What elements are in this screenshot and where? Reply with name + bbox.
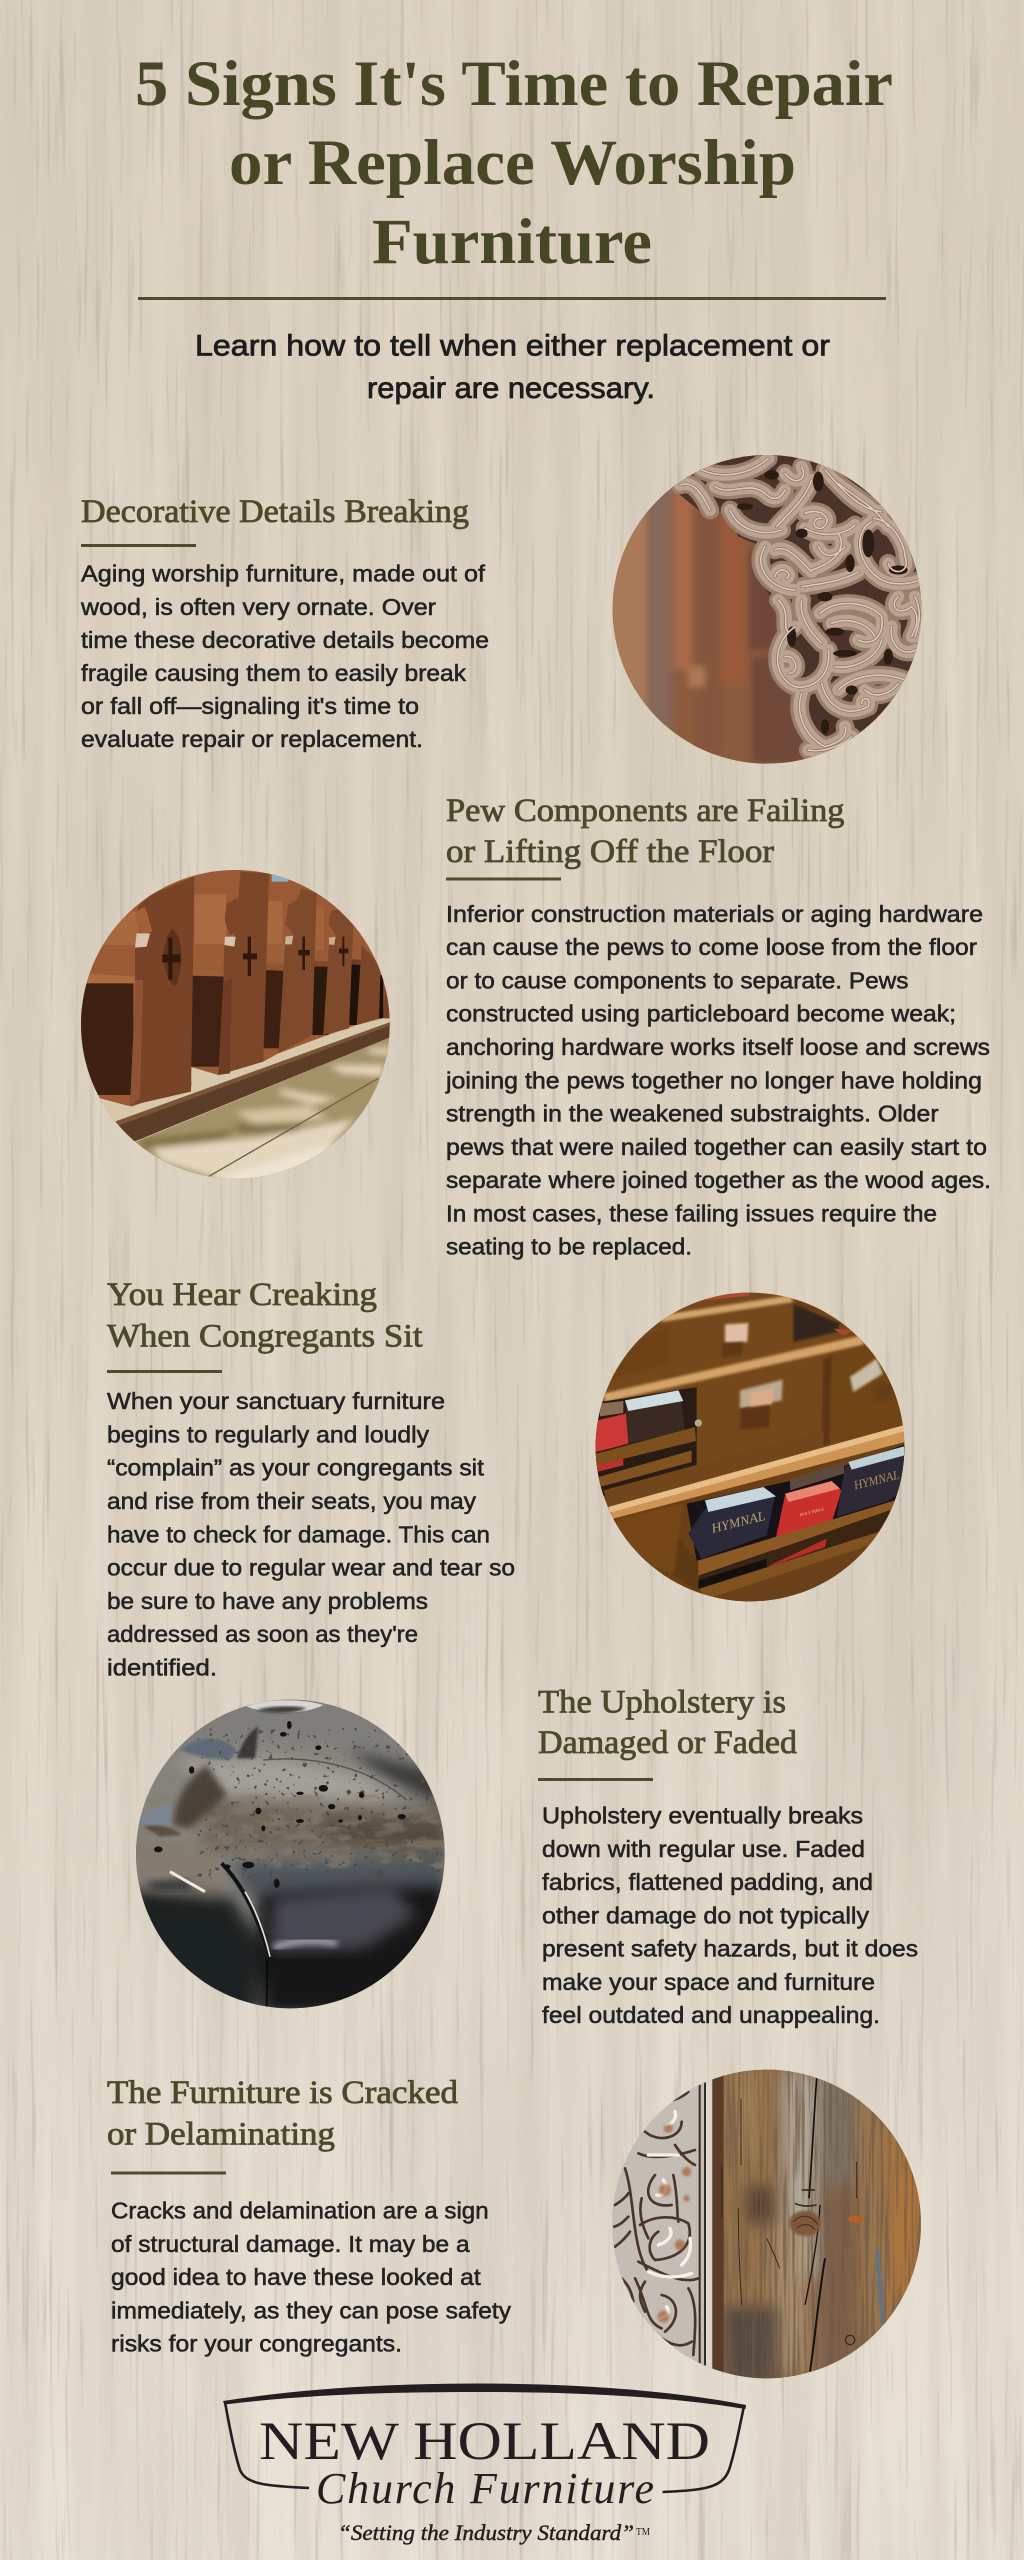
body text: pew components: Inferior construction materials or aging hardware [446,901,983,927]
heading: cracked: The Furniture is Cracked [107,2075,459,2111]
panel: you hear creaking [107,1277,915,1680]
body text: pew components: joining the pews together no longer have holding [445,1067,982,1093]
body text: upholstery: fabrics, flattened padding, and [542,1869,873,1895]
heading rule [107,1370,222,1373]
body text: creaking: When your sanctuary furniture [107,1388,445,1414]
body text: decorative details: Aging worship furniture, made out of [81,561,486,587]
subtitle: repair are necessary. [367,372,655,405]
heading: decorative details: Decorative Details Breaking [81,494,469,530]
body text: creaking: identified. [107,1654,217,1680]
body text: pew components: or to cause components to separate. Pews [446,967,908,993]
body text: creaking: be sure to have any problems [107,1588,428,1614]
panel: furniture cracked [107,2065,930,2385]
body text: upholstery: present safety hazards, but it does [542,1936,918,1962]
body text: pew components [445,901,991,1260]
body text: pew components: anchoring hardware works itself loose and screws [446,1034,990,1060]
shaded under-seat areas [75,963,383,1095]
body text: creaking [107,1388,515,1680]
body text: pew components: In most cases, these failing issues require the [446,1200,937,1226]
heading rule [111,2172,226,2174]
body text: pew components: seating to be replaced. [446,1234,692,1260]
heading rule [81,544,196,547]
heading: pew components: or Lifting Off the Floor [446,834,774,870]
body text: cracked: of structural damage. It may be a [111,2231,470,2257]
photo: damaged leather [130,1695,455,2015]
heading: upholstery: Damaged or Faded [538,1725,798,1761]
heading rule [446,878,561,880]
subtitle [195,330,830,405]
cracks and knots [722,2078,857,2372]
front rack rails [693,1500,895,1576]
body text: upholstery: other damage do not typically [542,1902,870,1928]
front books: HOLY BIBLE [799,1506,825,1517]
front books: HYMNAL [709,1508,767,1536]
base rail [115,1022,392,1143]
heading: creaking: When Congregants Sit [107,1319,423,1355]
logo wordmark: NEW HOLLAND [259,2411,710,2471]
body text: pew components: constructed using particleboard become weak; [446,1001,956,1027]
body text: creaking: addressed as soon as they're [107,1621,418,1647]
logo tagline: “Setting the Industry Standard” [338,2520,634,2545]
body text: decorative details: time these decorative details become [81,627,489,653]
body text: upholstery: down with regular use. Faded [542,1836,865,1862]
carved crosses [162,928,348,987]
heading: pew components: Pew Components are Failing [446,793,844,829]
front books: HYMNAL [851,1468,901,1493]
heading: cracked: or Delaminating [107,2117,335,2153]
left rack of books [590,1387,702,1500]
pew ends [130,872,392,1106]
body text: decorative details: evaluate repair or replacement. [81,726,423,752]
body text: decorative details: fragile causing them to easily break [81,660,467,686]
front rail [608,1425,905,1519]
body text: pew components: pews that were nailed together can easily start to [446,1134,987,1160]
photo: cracked weathered wood [605,2065,930,2385]
logo subtitle: Church Furniture [316,2464,654,2513]
body text: decorative details [80,561,489,752]
heading: creaking [107,1277,423,1355]
body text: cracked: Cracks and delamination are a sign [111,2198,489,2224]
panel: decorative details breaking [80,450,938,770]
title: 5 Signs It's Time to Repair [135,48,893,120]
heading: cracked [107,2075,459,2153]
body text: decorative details: or fall off—signaling it's time to [81,693,419,719]
panel: upholstery damaged [130,1684,918,2028]
body text: decorative details: wood, is often very ornate. Over [80,594,436,620]
body text: cracked [111,2198,512,2357]
body text: cracked: immediately, as they can pose safety [111,2298,512,2324]
trademark: TM [636,2526,650,2538]
logo frame [223,2384,746,2492]
heading: upholstery: The Upholstery is [538,1684,786,1720]
photo: pew rack with hymnals [590,1287,915,1607]
heading rule [538,1778,653,1781]
panel: pew components failing [75,793,991,1260]
body text: creaking: “complain” as your congregants sit [107,1455,485,1481]
body text: cracked: good idea to have these looked at [111,2264,481,2290]
logo: New Holland Church Furniture [223,2384,746,2545]
title [135,48,893,278]
body text: upholstery: make your space and furniture [542,1969,875,1995]
heading: pew components [446,793,844,870]
body text: creaking: begins to regularly and loudly [107,1422,430,1448]
heading: upholstery [538,1684,798,1761]
heading: creaking: You Hear Creaking [107,1277,377,1313]
body text: cracked: risks for your congregants. [111,2331,402,2357]
photo: church pews [75,865,400,1185]
body text: upholstery: feel outdated and unappealing. [542,2002,880,2028]
title: Furniture [372,206,652,278]
front books [687,1444,907,1580]
title: or Replace Worship [229,127,796,199]
title rule [138,297,886,300]
body text: pew components: separate where joined together as the wood ages. [446,1167,991,1193]
body text: upholstery: Upholstery eventually breaks [542,1803,863,1829]
body text: upholstery [542,1803,918,2028]
photo: carved ornate wood [612,455,922,764]
body text: creaking: have to check for damage. This can [107,1521,490,1547]
floor [100,1018,390,1178]
body text: pew components: can cause the pews to come loose from the floor [446,934,977,960]
body text: creaking: and rise from their seats, you may [107,1488,477,1514]
body text: creaking: occur due to regular wear and tear so [107,1555,515,1581]
body text: pew components: strength in the weakened substraights. Older [446,1101,939,1127]
subtitle: Learn how to tell when either replacement or [195,330,830,362]
